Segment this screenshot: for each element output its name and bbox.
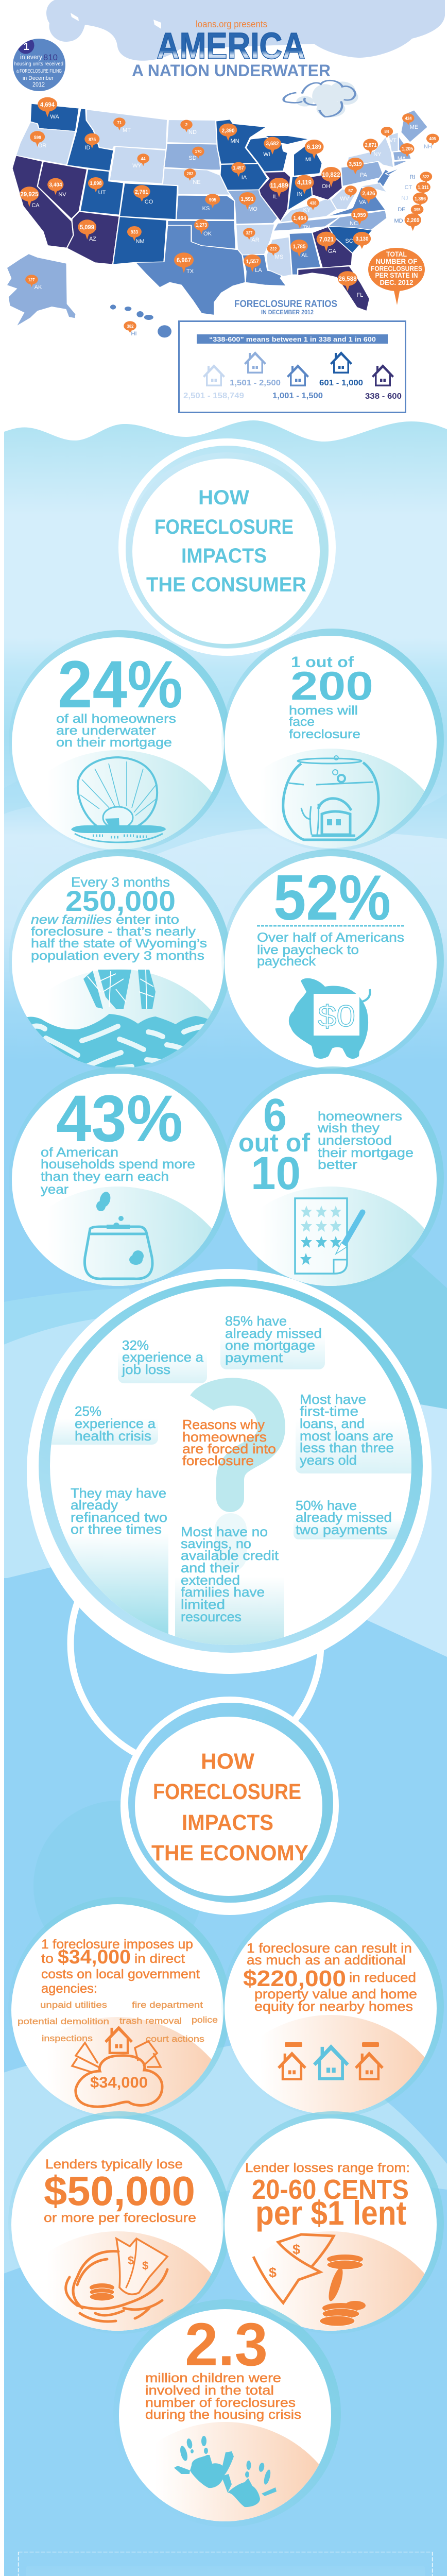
state labels: VA bbox=[359, 199, 367, 206]
panel: reasons why homeowners are forced into foreclosure: 85% have bbox=[225, 1313, 287, 1329]
legend box bbox=[179, 321, 406, 412]
icon: house 601-1,000 bbox=[330, 351, 352, 374]
panel: $50,000 lender loss: $ bbox=[142, 2259, 148, 2272]
callout: total foreclosures pin: PER STATE IN bbox=[375, 271, 418, 279]
state labels: CO bbox=[145, 199, 153, 205]
pin values: 2,871 bbox=[365, 142, 377, 148]
panel: 6 out of 10: their mortgage bbox=[318, 1146, 413, 1160]
panel: 24% underwater bbox=[10, 630, 228, 851]
pin values: 1,396 bbox=[415, 196, 426, 202]
icon: piggy bank bbox=[289, 978, 370, 1059]
panel: 6 out of 10: better bbox=[318, 1158, 357, 1172]
panel: reasons why homeowners are forced into foreclosure: already bbox=[71, 1497, 118, 1513]
panel: $220,000 reduced value bbox=[221, 1895, 444, 2114]
header text bbox=[132, 19, 331, 80]
panel: reasons why homeowners are forced into foreclosure: available credit bbox=[181, 1548, 279, 1563]
panel: 43% households: year bbox=[41, 1182, 68, 1197]
panel: $220,000 reduced value: equity for nearby homes bbox=[254, 1998, 413, 2014]
panel: reasons why homeowners are forced into foreclosure bbox=[27, 1269, 432, 1674]
state labels: IL bbox=[272, 194, 278, 200]
pin values: 71 bbox=[117, 120, 122, 125]
state labels: OH bbox=[322, 183, 330, 190]
pin values: 4,694 bbox=[40, 101, 55, 108]
panel: $34,000 local costs: in direct bbox=[134, 1952, 185, 1966]
panel: $34,000 local costs: unpaid utilities bbox=[40, 2000, 107, 2010]
panel: 20-60 cents per $1 bbox=[221, 2111, 444, 2331]
pin values: 127 bbox=[28, 278, 35, 282]
panel: $220,000 reduced value: in reduced bbox=[349, 1970, 416, 1985]
panel: $220,000 reduced value: property value and home bbox=[254, 1986, 417, 2002]
pin values: 3,519 bbox=[349, 161, 361, 167]
map pins bbox=[20, 97, 439, 333]
panel: 52% paycheck: live paycheck to bbox=[257, 943, 359, 957]
panel: 1 out of 200 bbox=[221, 629, 444, 850]
panel: reasons why homeowners are forced into foreclosure: limited bbox=[181, 1597, 225, 1612]
state labels: MN bbox=[230, 138, 239, 144]
panel: 52% paycheck: 52% bbox=[273, 862, 391, 934]
panel: 1 out of 200: foreclosure bbox=[289, 727, 360, 741]
pin values: 382 bbox=[127, 324, 134, 329]
pin values: 3,682 bbox=[266, 141, 279, 147]
pin values: 1,591 bbox=[241, 196, 253, 202]
state labels: TN bbox=[303, 225, 310, 231]
pin values: 1,959 bbox=[353, 212, 366, 218]
panel: $50,000 lender loss bbox=[8, 2111, 228, 2331]
callout: total foreclosures pin: DEC. 2012 bbox=[380, 278, 413, 286]
state labels: NJ bbox=[401, 195, 408, 201]
panel: 24% underwater: are underwater bbox=[56, 724, 156, 738]
icon: purse and butterflies bbox=[84, 1191, 152, 1279]
pin values: 84 bbox=[384, 129, 389, 134]
state labels: OR bbox=[38, 143, 46, 149]
panel: 6 out of 10: 6 bbox=[263, 1090, 287, 1141]
state labels: NY bbox=[373, 151, 382, 158]
panel: resources bbox=[19, 2552, 433, 2576]
legend box: 2,501 - 158,749 bbox=[183, 392, 244, 400]
icon: bills and coins: $ bbox=[269, 2265, 277, 2280]
panel: reasons why homeowners are forced into foreclosure: Most have no bbox=[181, 1524, 268, 1539]
panel: reasons why homeowners are forced into foreclosure: already missed bbox=[225, 1326, 322, 1341]
badge: 1 in every 810: 2012 bbox=[32, 81, 45, 88]
legend box: 601 - 1,000 bbox=[319, 379, 363, 387]
badge: 1 in every 810: 1 bbox=[23, 41, 29, 53]
panel: 43% households bbox=[12, 1066, 228, 1286]
panel: consumer heading: IMPACTS bbox=[181, 545, 267, 567]
map of the United States bbox=[7, 104, 428, 337]
panel: 2.3 million children: involved in the total bbox=[145, 2383, 274, 2398]
icon: piggy bank: $0 bbox=[318, 999, 355, 1033]
pin values: 11,489 bbox=[270, 182, 288, 189]
pin values: 1,464 bbox=[294, 215, 306, 222]
legend box: 1,001 - 1,500 bbox=[272, 392, 323, 400]
state labels: WV bbox=[340, 196, 350, 202]
pin values bbox=[21, 101, 436, 329]
panel: 20-60 cents per $1: per $1 lent bbox=[255, 2194, 406, 2232]
panel: $34,000 local costs: trash removal bbox=[119, 2016, 182, 2026]
icon: house 2,501-158,749 bbox=[203, 364, 225, 386]
panel: reasons why homeowners are forced into foreclosure: already missed bbox=[296, 1510, 392, 1525]
icon: house 338-600 bbox=[372, 364, 394, 386]
state labels: DE bbox=[398, 207, 406, 213]
panel: economy heading: HOW bbox=[201, 1749, 254, 1774]
state labels: MO bbox=[248, 206, 257, 212]
badge: 1 in every 810 bbox=[13, 37, 65, 91]
pin values: 405 bbox=[429, 137, 436, 141]
state labels: RI bbox=[410, 174, 415, 180]
pin values: 6,967 bbox=[177, 257, 191, 264]
state labels: IN bbox=[297, 191, 303, 197]
panel: 250,000 new families: population every 3 months bbox=[31, 949, 204, 963]
pin values: 327 bbox=[246, 231, 253, 235]
legend heading bbox=[234, 299, 337, 316]
panel: $34,000 local costs: court actions bbox=[146, 2034, 204, 2044]
panel: 24% underwater: on their mortgage bbox=[56, 736, 172, 750]
panel: economy heading: FORECLOSURE bbox=[153, 1780, 301, 1804]
pin values: 1,098 bbox=[90, 181, 102, 187]
panel: economy heading bbox=[120, 1697, 339, 1915]
pin values: 438 bbox=[310, 201, 317, 206]
panel: $34,000 local costs: $34,000 bbox=[58, 1946, 131, 1968]
pin values: 29,925 bbox=[21, 191, 39, 198]
icon: money nest bbox=[66, 2239, 167, 2321]
panel: reasons why homeowners are forced into foreclosure: resources bbox=[181, 1609, 242, 1624]
legend box: “338-600” means between 1 in 338 and 1 in 600 bbox=[209, 335, 376, 343]
panel: $34,000 local costs: police bbox=[192, 2015, 218, 2025]
panel: $34,000 local costs: to bbox=[41, 1952, 54, 1966]
panel: consumer heading: FORECLOSURE bbox=[154, 516, 294, 538]
panel: 52% paycheck bbox=[221, 849, 444, 1072]
panel: 24% underwater: of all homeowners bbox=[56, 712, 176, 726]
badge: 1 in every 810: housing units received bbox=[14, 61, 63, 67]
pin values: 170 bbox=[195, 149, 202, 154]
panel: reasons why homeowners are forced into foreclosure: 50% have bbox=[296, 1498, 357, 1513]
panel: 2.3 million children: million children were bbox=[145, 2371, 281, 2385]
panel: consumer heading: THE CONSUMER bbox=[146, 573, 306, 596]
state labels: CA bbox=[31, 202, 40, 209]
panel: 250,000 new families: new families bbox=[31, 913, 112, 927]
state labels: AZ bbox=[89, 236, 96, 242]
panel: reasons why homeowners are forced into foreclosure: loans, and bbox=[300, 1416, 365, 1431]
pin values: 10,822 bbox=[322, 171, 340, 178]
pin values: 2,390 bbox=[221, 128, 235, 134]
panel: 6 out of 10: understood bbox=[318, 1133, 392, 1148]
panel: reasons why homeowners are forced into foreclosure: families have bbox=[181, 1584, 265, 1600]
panel: reasons why homeowners are forced into foreclosure: Reasons why bbox=[182, 1417, 265, 1432]
pin values: 282 bbox=[186, 171, 194, 176]
panel: reasons why homeowners are forced into foreclosure: savings, no bbox=[181, 1536, 251, 1551]
panel: $50,000 lender loss: $50,000 bbox=[44, 2168, 195, 2214]
panel: economy heading: THE ECONOMY bbox=[151, 1841, 308, 1866]
callout: total foreclosures pin: NUMBER OF bbox=[376, 257, 418, 265]
icon: money bag with house: $34,000 bbox=[90, 2074, 148, 2091]
pin values: 3,130 bbox=[355, 236, 369, 242]
state labels: ID bbox=[84, 145, 91, 151]
state labels: MD bbox=[394, 218, 403, 224]
panel: 250,000 new families bbox=[9, 849, 228, 1069]
panel: $220,000 reduced value: 1 foreclosure can result in bbox=[247, 1940, 412, 1956]
panel: reasons why homeowners are forced into foreclosure: years old bbox=[300, 1452, 357, 1468]
callout: total foreclosures pin: FORECLOSURES bbox=[371, 264, 422, 273]
panel: reasons why homeowners are forced into foreclosure: experience a bbox=[75, 1416, 156, 1431]
pin values: 2,269 bbox=[407, 217, 419, 224]
state labels: SC bbox=[345, 238, 353, 244]
panel: 6 out of 10: homeowners bbox=[318, 1109, 402, 1124]
panel: 20-60 cents per $1: Lender losses range from: bbox=[245, 2161, 410, 2175]
pin values: 1,205 bbox=[402, 146, 413, 152]
panel: reasons why homeowners are forced into foreclosure: homeowners bbox=[182, 1429, 267, 1445]
state labels: GA bbox=[328, 248, 337, 255]
state labels: WI bbox=[263, 151, 270, 158]
state labels: MI bbox=[305, 157, 312, 163]
panel: 6 out of 10 bbox=[221, 1066, 444, 1286]
icon: money bag with house bbox=[72, 2026, 162, 2107]
pin values: 7,021 bbox=[319, 236, 334, 243]
icon: shell with pearl bbox=[71, 757, 166, 842]
panel: 1 out of 200: face bbox=[289, 715, 315, 729]
icon: sinking legs bbox=[83, 970, 156, 1009]
callout: total foreclosures pin bbox=[368, 248, 425, 305]
state labels: LA bbox=[255, 267, 262, 274]
pin values: 933 bbox=[131, 230, 138, 235]
state labels: NH bbox=[424, 144, 432, 150]
state labels: NE bbox=[193, 179, 201, 185]
pin values: 2 bbox=[185, 122, 188, 127]
panel: 250,000 new families: 250,000 bbox=[65, 885, 176, 917]
panel: $220,000 reduced value: as much as an additional bbox=[247, 1952, 406, 1968]
callout: total foreclosures pin: TOTAL bbox=[386, 250, 407, 258]
panel: reasons why homeowners are forced into foreclosure: They may have bbox=[71, 1485, 166, 1501]
panel: 43% households: households spend more bbox=[41, 1157, 195, 1172]
pin values: 1,273 bbox=[196, 223, 207, 228]
icon: waves bbox=[27, 1014, 208, 1069]
state labels: KS bbox=[202, 206, 210, 212]
pin values: 44 bbox=[141, 156, 146, 161]
panel: 52% paycheck: Over half of Americans bbox=[257, 930, 404, 945]
icon: bills and coins: $ bbox=[292, 2242, 300, 2257]
state labels: SD bbox=[188, 155, 197, 161]
panel: reasons why homeowners are forced into foreclosure: two payments bbox=[296, 1522, 387, 1537]
panel: $34,000 local costs: costs on local government bbox=[41, 1967, 200, 1981]
state labels: VT bbox=[389, 138, 397, 144]
panel: reasons why homeowners are forced into foreclosure: extended bbox=[181, 1572, 240, 1588]
state labels: AK bbox=[35, 284, 42, 291]
cloud banner bbox=[46, 0, 445, 61]
panel: reasons why homeowners are forced into foreclosure: first-time bbox=[300, 1403, 358, 1419]
panel: 2.3 million children: number of foreclosures bbox=[145, 2396, 296, 2410]
panel: reasons why homeowners are forced into foreclosure: most loans are bbox=[300, 1428, 393, 1444]
icon: checklist with pencil bbox=[295, 1198, 363, 1274]
state labels bbox=[31, 114, 432, 337]
decorative connecting ring bbox=[71, 1518, 321, 1769]
panel: reasons why homeowners are forced into foreclosure: and their bbox=[181, 1560, 239, 1575]
icon: three houses with minus signs bbox=[278, 2042, 384, 2080]
panel: consumer heading: HOW bbox=[198, 486, 249, 509]
state labels: WA bbox=[50, 114, 59, 120]
state labels: AL bbox=[301, 252, 308, 259]
icon: small cloud bbox=[284, 80, 358, 117]
panel: 6 out of 10: 10 bbox=[251, 1148, 301, 1199]
state labels: AR bbox=[251, 237, 260, 243]
icon: question mark bbox=[202, 1392, 271, 1556]
panel: 250,000 new families: foreclosure - that’s nearly bbox=[31, 925, 196, 939]
state labels: PA bbox=[360, 172, 368, 178]
panel: reasons why homeowners are forced into foreclosure: less than three bbox=[300, 1440, 394, 1455]
pin values: 57 bbox=[348, 189, 353, 193]
pin values: 2,761 bbox=[135, 189, 148, 195]
state labels: OK bbox=[203, 231, 212, 237]
pin values: 875 bbox=[89, 137, 96, 143]
state labels: ND bbox=[188, 129, 197, 135]
title: AMERICA: AMERICA bbox=[157, 26, 305, 67]
icon: house 1,501-2,500 bbox=[244, 351, 266, 374]
panel: 43% households: of American bbox=[41, 1145, 118, 1160]
panel: 6 out of 10: wish they bbox=[317, 1121, 380, 1136]
state labels: ME bbox=[410, 124, 418, 130]
icon: bills and coins bbox=[253, 2234, 366, 2326]
panel: reasons why homeowners are forced into foreclosure: are forced into bbox=[182, 1441, 276, 1456]
panel: consumer heading bbox=[122, 442, 332, 652]
panel: reasons why homeowners are forced into foreclosure: health crisis bbox=[75, 1428, 151, 1444]
panel: reasons why homeowners are forced into foreclosure: payment bbox=[225, 1350, 283, 1365]
badge: 1 in every 810: in December bbox=[23, 75, 54, 81]
state labels: MS bbox=[275, 254, 283, 260]
pin values: 4,119 bbox=[297, 179, 312, 186]
state labels: NV bbox=[58, 192, 66, 198]
pin values: 1,557 bbox=[246, 259, 259, 265]
panel: 2.3 million children: 2.3 bbox=[185, 2311, 268, 2379]
state labels: FL bbox=[357, 292, 363, 298]
state labels: MA bbox=[398, 156, 406, 162]
panel: 2.3 million children: during the housing crisis bbox=[145, 2408, 301, 2422]
icon: house 1,001-1,500 bbox=[287, 364, 309, 386]
icon: handprints bbox=[174, 2436, 277, 2507]
panel: reasons why homeowners are forced into foreclosure: experience a bbox=[122, 1349, 204, 1365]
panel: economy heading: IMPACTS bbox=[182, 1810, 273, 1835]
state labels: KY bbox=[303, 207, 311, 213]
pin values: 1,311 bbox=[418, 185, 429, 191]
panel: 1 out of 200: 200 bbox=[290, 663, 373, 708]
state labels: NM bbox=[135, 239, 145, 245]
panel: reasons why homeowners are forced into foreclosure: Most have bbox=[300, 1392, 366, 1407]
panel: reasons why homeowners are forced into foreclosure: 25% bbox=[75, 1403, 101, 1419]
panel: 43% households: 43% bbox=[56, 1082, 183, 1156]
panel: $34,000 local costs: 1 foreclosure imposes up bbox=[41, 1937, 193, 1952]
panel: reasons why homeowners are forced into foreclosure: or three times bbox=[71, 1521, 162, 1537]
pin values: 322 bbox=[422, 175, 429, 179]
state labels: HI bbox=[131, 331, 137, 337]
panel: $50,000 lender loss: or more per foreclosure bbox=[44, 2211, 196, 2225]
panel: $220,000 reduced value: $220,000 bbox=[243, 1966, 346, 1991]
badge: 1 in every 810: 810 bbox=[43, 53, 58, 62]
panel: 1 out of 200: 1 out of bbox=[291, 654, 354, 671]
panel: 52% paycheck: paycheck bbox=[257, 954, 316, 969]
panel: $34,000 local costs: inspections bbox=[42, 2033, 93, 2043]
panel: 6 out of 10: out of bbox=[238, 1128, 310, 1157]
subtitle: A NATION UNDERWATER bbox=[132, 61, 331, 80]
panel: 250,000 new families: Every 3 months bbox=[71, 874, 170, 890]
panel: reasons why homeowners are forced into foreclosure: job loss bbox=[122, 1362, 170, 1377]
header text: loans.org presents bbox=[196, 19, 267, 29]
pin values: 424 bbox=[405, 116, 412, 121]
panel: $34,000 local costs: fire department bbox=[132, 2000, 203, 2010]
state labels: MT bbox=[123, 127, 131, 133]
state labels: IA bbox=[242, 175, 247, 181]
panel: reasons why homeowners are forced into foreclosure: refinanced two bbox=[71, 1510, 167, 1525]
legend heading: IN DECEMBER 2012 bbox=[261, 309, 314, 316]
pin values: 395 bbox=[414, 208, 421, 212]
pin values: 1,457 bbox=[233, 165, 244, 171]
state labels: WY bbox=[132, 163, 142, 169]
state labels: NC bbox=[350, 221, 358, 227]
state labels: CT bbox=[405, 184, 412, 191]
panel: 43% households: than they earn each bbox=[41, 1170, 169, 1184]
panel: 250,000 new families: enter into bbox=[116, 913, 179, 927]
pin values: 1,785 bbox=[292, 244, 306, 250]
legend box: 338 - 600 bbox=[365, 392, 402, 401]
panel: $34,000 local costs: potential demolition bbox=[18, 2016, 109, 2026]
icon: fishbowl with house bbox=[283, 756, 378, 840]
pin values: 222 bbox=[270, 247, 277, 251]
panel: 250,000 new families: half the state of Wyoming’s bbox=[31, 937, 207, 951]
pin values: 2,426 bbox=[363, 191, 375, 197]
panel: $50,000 lender loss: $ bbox=[128, 2254, 134, 2267]
pin values: 5,099 bbox=[80, 224, 94, 231]
pin values: 6,189 bbox=[307, 143, 321, 150]
state labels: UT bbox=[98, 190, 106, 196]
panel: $50,000 lender loss: Lenders typically lose bbox=[45, 2157, 183, 2172]
pin values: 26,588 bbox=[339, 275, 357, 282]
panel: 2.3 million children bbox=[119, 2299, 341, 2521]
pin values: 599 bbox=[34, 135, 41, 141]
panel: reasons why homeowners are forced into foreclosure: one mortgage bbox=[225, 1337, 315, 1353]
badge: 1 in every 810: a FORECLOSURE FILING bbox=[16, 69, 62, 74]
pin values: 3,404 bbox=[49, 182, 62, 188]
panel: 24% underwater: 24% bbox=[58, 647, 183, 722]
badge: 1 in every 810: in every bbox=[20, 53, 42, 61]
panel: 20-60 cents per $1: 20-60 CENTS bbox=[252, 2174, 409, 2205]
panel: $34,000 local costs bbox=[11, 1897, 228, 2116]
panel: $34,000 local costs: agencies: bbox=[41, 1981, 97, 1996]
state labels: TX bbox=[186, 268, 194, 275]
pin values: 905 bbox=[209, 197, 217, 203]
legend box: 1,501 - 2,500 bbox=[230, 379, 281, 387]
panel: reasons why homeowners are forced into foreclosure: foreclosure bbox=[182, 1453, 254, 1468]
legend heading: FORECLOSURE RATIOS bbox=[234, 299, 337, 310]
panel: 1 out of 200: homes will bbox=[289, 704, 358, 718]
panel: reasons why homeowners are forced into foreclosure: 32% bbox=[122, 1337, 149, 1353]
